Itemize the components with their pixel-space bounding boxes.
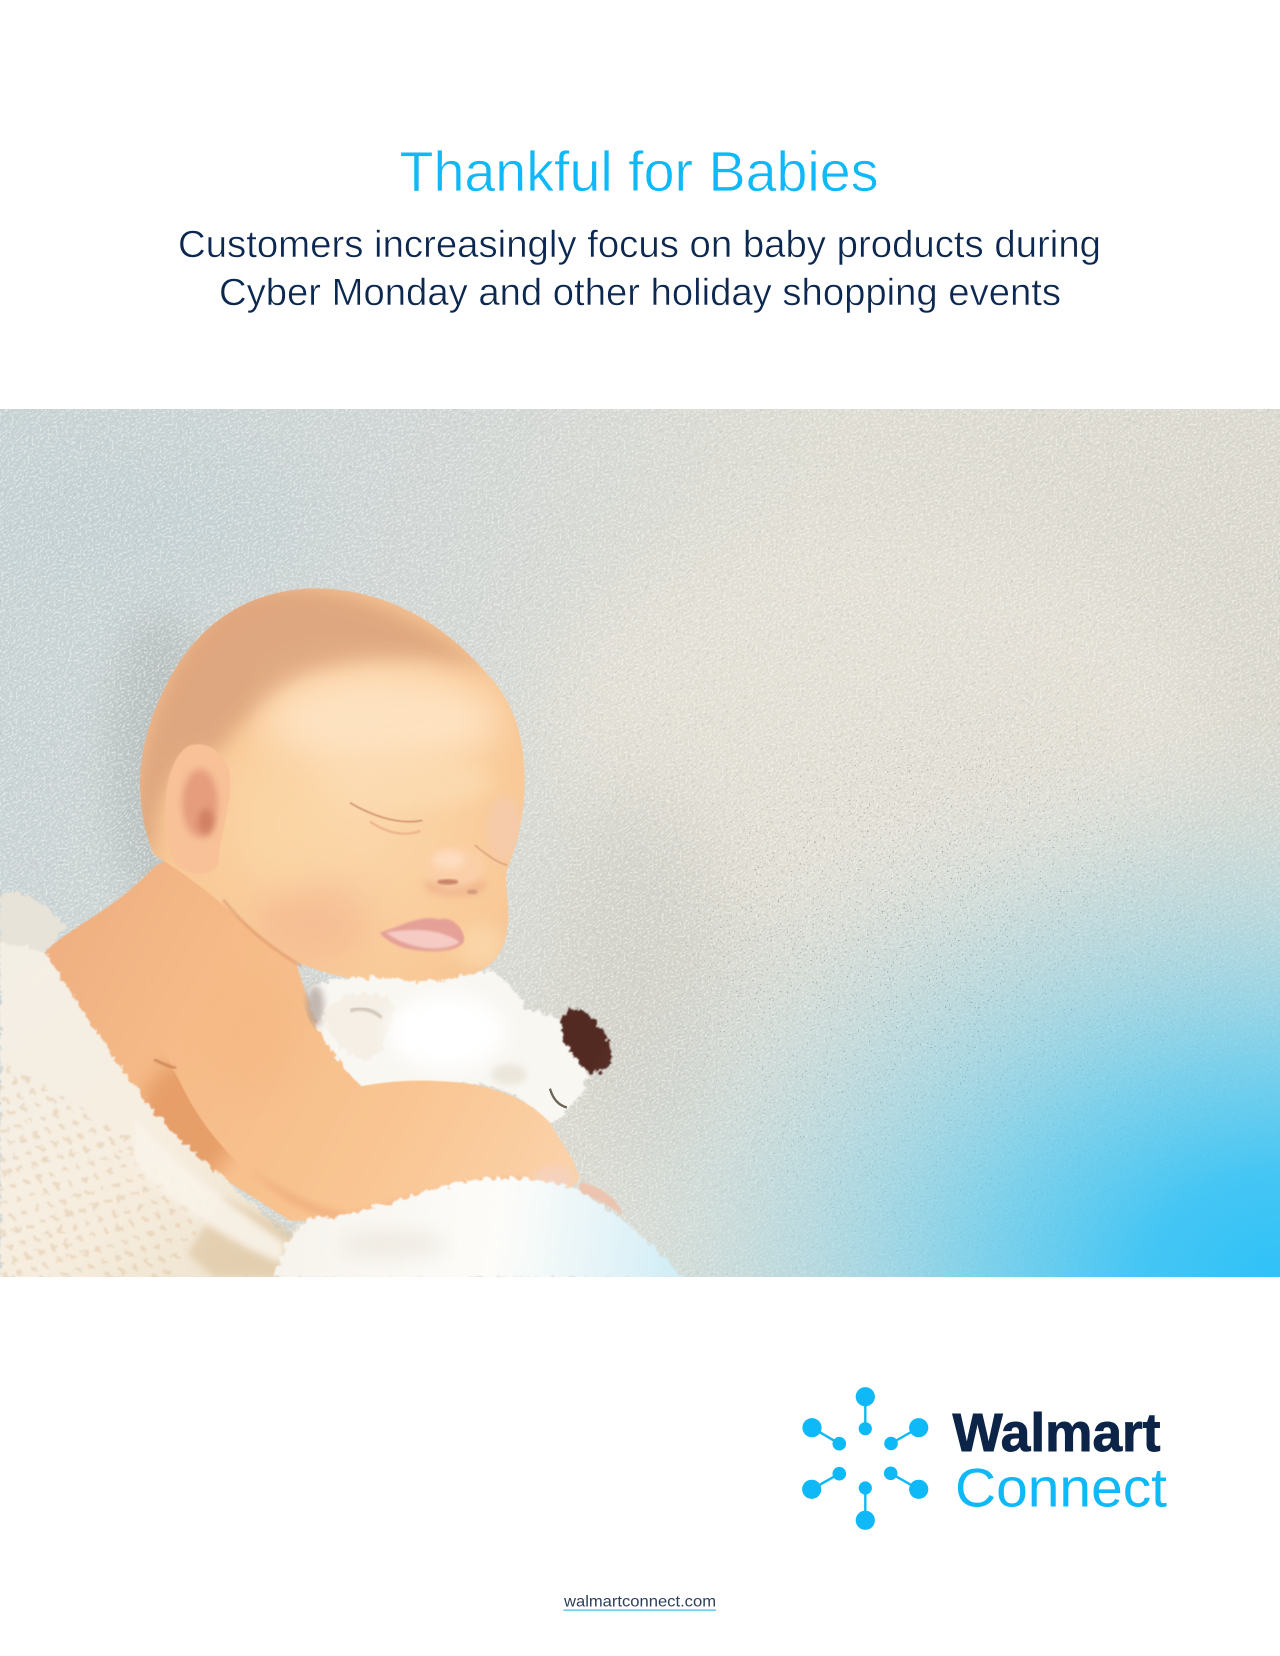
plush toy body [273,1178,683,1278]
subtitle [178,224,1101,314]
ear [165,744,231,874]
mouth [379,918,464,951]
title: Thankful for Babies [400,140,878,204]
subtitle line 1: Customers increasingly focus on baby products during [178,224,1101,266]
photo: sleeping newborn hugging a plush toy [0,409,1280,1278]
baby body [45,848,366,1221]
nose [424,846,487,897]
closed eye, far [475,846,507,865]
forehead highlight [268,673,500,768]
fabric backdrop [0,409,1280,1277]
baby fingers [578,1182,623,1215]
cheek blush [262,886,366,959]
logo wordmark: Connect: Connect [955,1456,1167,1518]
plush toy mouth [550,1089,567,1108]
plush toy nose [561,1009,611,1073]
baby arm [147,938,579,1219]
knit wrap [0,943,299,1278]
closed eye, near [350,803,422,834]
footer link: walmartconnect.com [563,1594,716,1610]
logo: Walmart Connect [802,1387,1167,1530]
blue gradient wash, bottom right [450,700,1280,1277]
far side of face [488,798,520,861]
logo wordmark: Walmart: Walmart [952,1403,1161,1463]
knit wrap, upper tuft [0,892,65,956]
neck crease [223,900,301,966]
baby and wrap, drawn in zoomed crop coordinates [0,588,683,1278]
subtitle line 2: Cyber Monday and other holiday shopping events [219,272,1061,314]
baby head [134,588,525,985]
plush toy head [306,972,586,1124]
logo spark icon [802,1387,928,1530]
hair [134,588,491,853]
